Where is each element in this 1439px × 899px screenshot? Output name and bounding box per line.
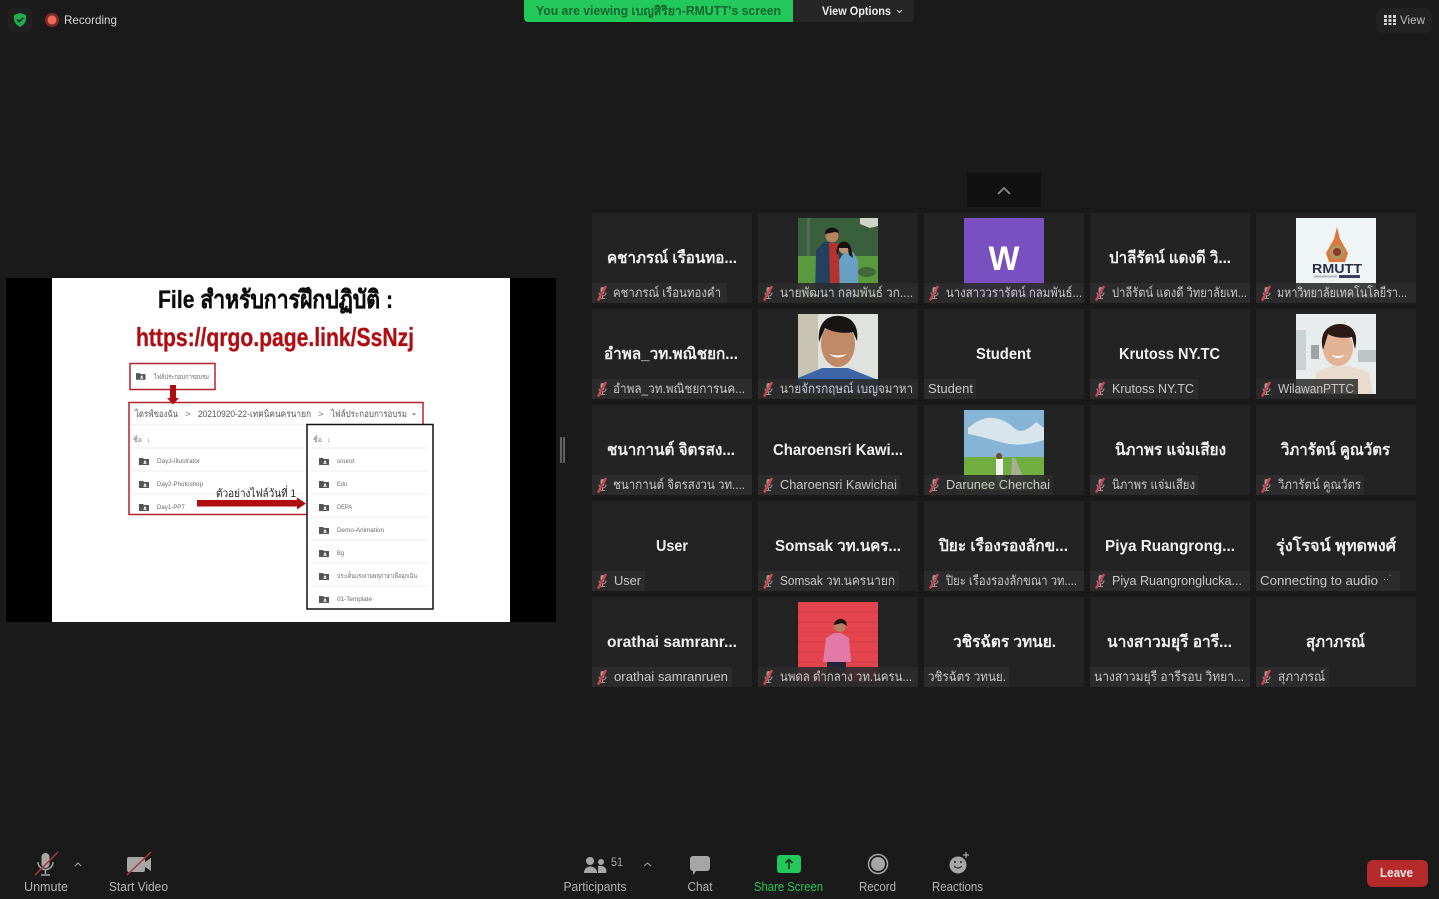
leave button: Leave [1380,866,1413,880]
participant tile 19: Piya Ruangrong... [1105,538,1235,555]
icon: recording indicator [45,13,59,27]
arrow: to day one files [197,498,306,510]
participant tile 25: สุภาภรณ์ [1306,632,1365,652]
participant tile 20: รุ่งโรจน์ พุทดพงศ์ [1276,535,1397,556]
participant tile 7 with portrait: นายจักรกฤษณ์ เบญจมาหา [780,381,913,396]
participant tile 11 [592,405,752,495]
folder rows [319,458,417,603]
participant tile 18 [924,501,1084,591]
participant tile 21: orathai samranr... [607,634,737,651]
participant tile 15: วิภารัตน์ คูณวัตร [1277,477,1361,493]
share screen control [754,855,823,894]
participant tile 23 [924,597,1084,687]
participant tile 11: ชนากานต์ จิตรสงวน วท.... [613,477,745,492]
photo: woman in rice field [964,410,1044,490]
participant tile 6: อำพล_วท.พณิชยก... [604,345,738,363]
breadcrumb: > [185,409,191,420]
participant gallery [592,213,1416,687]
folder rows: 01-Template [337,596,372,603]
unmute control: Unmute [24,879,68,894]
participant tile 6 [592,309,752,399]
reactions control [932,852,983,894]
folder rows: Demo-Animation [337,527,384,534]
participant tile 17: Somsak วท.นคร... [775,538,901,555]
screen share banner [524,0,914,22]
participant tile 8: Student [928,381,973,396]
participant tile 19: Piya Ruangronglucka... [1112,573,1242,588]
participant tile 25 [1256,597,1416,687]
participant tile 11: ชนากานต์ จิตรสง... [607,440,735,459]
folder list: Day1-PPT [157,504,185,511]
view options button [793,0,914,22]
avatar: purple W: W [988,240,1020,278]
participant tile 5 with RMUTT logo [1256,213,1416,303]
folder callout: ไฟล์ประกอบการอบรม [153,373,209,381]
participant tile 14 [1090,405,1250,495]
participant tile 9: Krutoss NY.TC [1119,346,1220,363]
icon: security shield [8,8,32,32]
participant tile 7 with portrait [758,309,918,399]
column header: ชื่อ [133,435,142,444]
record control [859,854,896,894]
folder rows: DEPA [337,504,353,511]
participant tile 19 [1090,501,1250,591]
participant tile 8: Student [976,346,1032,363]
reactions control: Reactions [932,879,983,894]
participant tile 15 [1256,405,1416,495]
participant tile 24: นางสาวมยุรี อารี... [1107,632,1232,652]
photo: man in blue shirt [798,314,878,394]
participant tile 24 [1090,597,1250,687]
day one folder panel: ชื่อ [313,435,322,444]
participant tile 2 with couple photo [758,213,918,303]
folder callout [130,364,215,390]
participant tile 13 with landscape [924,405,1084,495]
avatar: purple W [964,218,1044,298]
participant tile 12: Charoensri Kawichai [780,477,897,492]
participant tile 1 [592,213,752,303]
folder rows: Edu [337,481,347,488]
day one folder panel [307,424,433,609]
breadcrumb: > [318,409,324,420]
slide link: https://qrgo.page.link/SsNzj [136,322,414,352]
folder rows: sound [337,458,354,465]
column header: ↓ [147,437,150,444]
participant tile 4 [1090,213,1250,303]
participant tile 14: นิภาพร แจ่มเสียง [1115,440,1226,459]
logo: RMUTT: RMUTT [1312,261,1362,276]
view options button: View Options [822,6,891,18]
participant tile 10 with portrait [1256,309,1416,399]
view layout button [1376,8,1432,33]
leave button [1367,860,1428,887]
participant tile 25: สุภาภรณ์ [1278,669,1325,685]
viewing notice [524,0,793,22]
participant tile 23: วชิรฉัตร วทนย. [928,669,1006,684]
unmute control [24,852,81,894]
photo: couple outdoors [798,218,878,298]
participant tile 17: Somsak วท.นครนายก [780,573,895,588]
participant tile 1: คชาภรณ์ เรือนทอ... [607,248,737,267]
day one folder panel: ↓ [327,437,330,444]
example caption: ตัวอย่างไฟล์วันที่ 1 [216,485,296,500]
participant tile 21: orathai samranruen [614,669,728,684]
participant tile 18: ปิยะ เรืองรองลักขณา วท.... [945,573,1077,588]
participant tile 21 [592,597,752,687]
folder list: Day3-Illustrator [157,458,201,465]
participant tile 9 [1090,309,1250,399]
participant tile 4: ปาลีรัตน์ แดงดี วิ... [1109,248,1231,267]
participant tile 22 with red wall photo: นพดล ดำกลาง วท.นครน... [780,669,912,684]
photo: smiling woman [1296,314,1376,394]
chat control: Chat [688,879,713,894]
participant tile 4: ปาลีรัตน์ แดงดี วิทยาลัยเท... [1112,285,1247,300]
gallery page up button [967,173,1041,207]
participants control: 51 [611,855,623,869]
breadcrumb: ไดรฟ์ของฉัน [134,408,178,420]
participant tile 9: Krutoss NY.TC [1112,381,1194,396]
participant tile 6: อำพล_วท.พณิชยการนค... [613,381,745,396]
participant tile 24: นางสาวมยุรี อารีรอบ วิทยา... [1094,669,1244,685]
participant tile 3 with W avatar: นางสาววรารัตน์ กลมพันธ์... [946,285,1082,300]
record control: Record [859,879,896,894]
shared slide [6,278,556,622]
participant tile 12 [758,405,918,495]
bottom toolbar [24,852,1428,894]
slide letterbox [6,278,556,622]
view layout button: View [1400,15,1426,27]
folder list [139,458,203,511]
slide title: File สำหรับการฝึกปฏิบัติ : [158,286,393,314]
slide page [52,278,510,622]
participant tile 22 with red wall photo [758,597,918,687]
photo: man at red wall [798,602,878,682]
participant tile 14: นิภาพร แจ่มเสียง [1112,477,1195,492]
participant tile 5 with RMUTT logo: มหาวิทยาลัยเทคโนโลยีรา... [1277,285,1407,300]
logo: RMUTT [1296,218,1376,298]
top left status: security and recording [8,8,117,32]
participant tile 1: คชาภรณ์ เรือนทองคำ [613,285,721,300]
viewing notice: You are viewing เบญสิริยา-RMUTT's screen [536,4,781,18]
panel splitter handle [561,437,564,463]
start video control [109,852,168,894]
breadcrumb: ไฟล์ประกอบการอบรม [330,408,407,420]
participant tile 10 with portrait: WilawanPTTC [1278,381,1354,396]
participant tile 2 with couple photo: นายพัฒนา กลมพันธ์ วก.... [780,285,913,300]
participant tile 20 [1256,501,1416,591]
participant tile 16: User [656,538,688,555]
start video control: Start Video [109,879,168,894]
breadcrumb [134,408,416,420]
participant tile 13 with landscape: Darunee Cherchai [946,477,1050,492]
participant tile 18: ปิยะ เรืองรองลักข... [938,537,1068,555]
participant tile 23: วชิรฉัตร วทนย. [953,633,1056,651]
breadcrumb: 20210920-22-เทคนิคนครนายก [198,409,311,420]
folder rows: ประเด็นแรงงานพหุภาษาเพื่อฉุกเฉิน [337,571,417,580]
chat control [688,856,713,894]
arrow: down to drive path [167,385,179,404]
participant tile 20: ··˙ [1383,574,1392,584]
participants control: Participants [564,879,627,894]
participant tile 16 [592,501,752,591]
participant tile 12: Charoensri Kawi... [773,442,903,459]
drive path panel [129,402,423,514]
participant tile 15: วิภารัตน์ คูณวัตร [1280,440,1390,461]
column header [133,435,150,444]
participant tile 17 [758,501,918,591]
participant tile 3 with W avatar [924,213,1084,303]
recording label: Recording [64,13,117,27]
participant tile 16: User [614,573,642,588]
folder list: Day2-Photoshop [157,481,203,488]
participant tile 8 [924,309,1084,399]
participants control [564,855,651,894]
folder rows: Bg [337,550,344,557]
participant tile 20: Connecting to audio [1260,573,1378,588]
share screen control: Share Screen [754,879,823,894]
